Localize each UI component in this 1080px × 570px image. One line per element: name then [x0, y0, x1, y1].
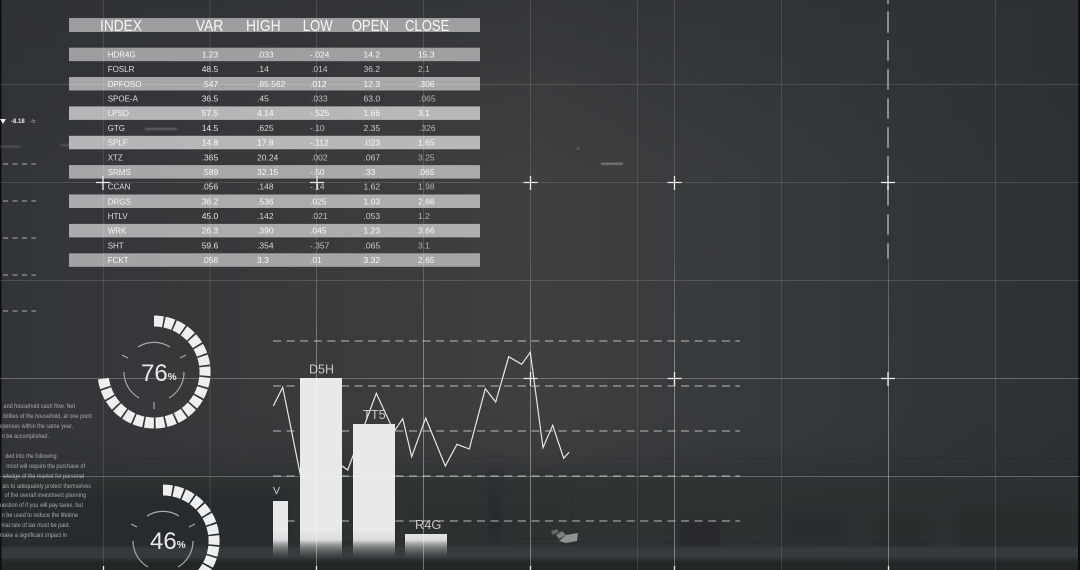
table HIGH column: .142 — [257, 211, 274, 221]
table LOW column: .025 — [310, 196, 327, 206]
left body paragraph, cropped by the edge: n be accomplished. — [2, 434, 49, 440]
bar: N — [273, 485, 288, 558]
table VAR column: 59.6 — [202, 240, 219, 250]
table ticker names: WRK — [108, 227, 127, 236]
table row stripes — [69, 48, 480, 267]
table LOW column: -.10 — [310, 123, 325, 133]
left body paragraph, cropped by the edge: uestion of if you will pay taxes, but — [0, 503, 83, 509]
table OPEN column: 12.3 — [364, 79, 380, 89]
table CLOSE column: 3.25 — [418, 152, 435, 162]
table HIGH column: 4.14 — [257, 108, 274, 118]
crosshair markers — [96, 176, 895, 570]
table header row: OPEN — [352, 18, 389, 35]
table ticker names: FOSLR — [108, 65, 135, 74]
segmented ring 76% — [103, 321, 205, 423]
left ticker marks: -5 — [30, 119, 36, 125]
table OPEN column — [364, 50, 380, 265]
bar chart — [273, 362, 447, 558]
table HIGH column: .85.562 — [257, 79, 286, 89]
table CLOSE column: 1.65 — [418, 138, 435, 148]
table HIGH column: .625 — [257, 123, 274, 133]
table header row — [69, 18, 480, 35]
table VAR column: .056 — [202, 255, 219, 265]
table CLOSE column — [418, 50, 436, 265]
table LOW column: -.024 — [310, 50, 330, 60]
table HIGH column: 17.8 — [257, 138, 274, 148]
table HIGH column: .45 — [257, 94, 269, 104]
segmented ring 46% — [163, 490, 214, 570]
left body paragraph, cropped by the edge — [0, 404, 92, 539]
table VAR column: .547 — [202, 79, 219, 89]
table CLOSE column: 1.2 — [418, 211, 430, 221]
table OPEN column: .067 — [364, 152, 380, 162]
left ticker marks — [0, 119, 36, 125]
table LOW column: -.14 — [310, 182, 325, 192]
inner dial 76% — [122, 342, 186, 409]
left body paragraph, cropped by the edge: ded into the following: — [5, 454, 58, 460]
table VAR column: 26.3 — [202, 226, 219, 236]
table CLOSE column: 1.98 — [418, 182, 435, 192]
table ticker names: DPFOSO — [108, 80, 141, 89]
table CLOSE column: .306 — [418, 79, 435, 89]
left body paragraph, cropped by the edge: n be used to reduce the lifetime — [2, 513, 79, 519]
table HIGH column: .14 — [257, 64, 269, 74]
table OPEN column: 1.03 — [364, 196, 380, 206]
table ticker names: SRMS — [108, 168, 131, 177]
table CLOSE column: 15.3 — [418, 50, 435, 60]
table LOW column: -.112 — [310, 138, 329, 148]
table CLOSE column: 2.66 — [418, 196, 435, 206]
table OPEN column: 63.0 — [364, 94, 380, 104]
table ticker names: HTLV — [108, 212, 128, 221]
table ticker names: SHT — [108, 241, 124, 250]
chart horizontal dashed lines — [273, 341, 740, 521]
table header row: CLOSE — [405, 18, 449, 35]
table CLOSE column: .065 — [419, 94, 436, 104]
motion streak artifacts — [0, 128, 623, 164]
table HIGH column: 32.15 — [257, 167, 279, 177]
data table — [69, 18, 480, 267]
table header row: LOW — [303, 18, 333, 35]
table VAR column: 48.5 — [202, 64, 219, 74]
inner dial 46% — [131, 511, 195, 567]
bar: R4G: R4G — [415, 517, 441, 532]
table VAR column: 45.0 — [202, 211, 219, 221]
table LOW column: -.50 — [310, 167, 325, 177]
table HIGH column: .354 — [257, 240, 274, 250]
table LOW column: .045 — [310, 226, 327, 236]
left body paragraph, cropped by the edge: inal rate of tax must be paid. — [1, 523, 70, 529]
table HIGH column: 20.24 — [257, 152, 279, 162]
line chart — [273, 352, 569, 519]
table CLOSE column: 2.1 — [418, 64, 430, 74]
table OPEN column: .33 — [364, 167, 376, 177]
donut gauge: 46% — [131, 490, 214, 570]
table OPEN column: 3.32 — [364, 255, 380, 265]
table LOW column: -.357 — [310, 240, 330, 250]
table CLOSE column: 3.1 — [418, 108, 430, 118]
left body paragraph, cropped by the edge: of the overall investment planning — [5, 493, 86, 499]
value 76%: 76 — [141, 360, 168, 387]
table HIGH column: .033 — [257, 50, 274, 60]
table header row: HIGH — [246, 18, 281, 35]
donut gauge: 76% — [103, 321, 205, 423]
table OPEN column: .023 — [364, 138, 380, 148]
left body paragraph, cropped by the edge: and household cash flow. Net — [4, 404, 75, 410]
table VAR column: 36.2 — [202, 196, 219, 206]
table ticker names: HDR4G — [108, 50, 136, 60]
table VAR column: 14.8 — [202, 138, 219, 148]
left body paragraph, cropped by the edge: wledge of the market for personal — [2, 474, 84, 480]
left dashed tick lines — [3, 164, 36, 311]
table OPEN column: 2.35 — [364, 123, 380, 133]
table LOW column: .012 — [310, 79, 327, 89]
table ticker names: SPLF — [108, 139, 128, 148]
table HIGH column: .148 — [257, 182, 274, 192]
table CLOSE column: .065 — [418, 167, 435, 177]
table header row: INDEX — [100, 18, 142, 35]
table CLOSE column: 3.66 — [418, 226, 435, 236]
value 76%: % — [168, 372, 177, 383]
table OPEN column: .065 — [364, 240, 380, 250]
table ticker names: DRGS — [108, 197, 131, 206]
table VAR column: 1.23 — [202, 50, 219, 60]
table OPEN column: 14.2 — [364, 50, 380, 60]
table ticker names: GTG — [108, 124, 125, 133]
table OPEN column: .053 — [364, 211, 380, 221]
table VAR column: .056 — [202, 182, 219, 192]
table OPEN column: 1.23 — [364, 226, 380, 236]
left body paragraph, cropped by the edge: bilities of the household, at one point — [3, 414, 92, 420]
bar: N: V — [273, 485, 280, 497]
table LOW column: .01 — [310, 255, 322, 265]
table VAR column: .365 — [202, 152, 219, 162]
bar: R4G — [405, 517, 447, 558]
bar: TT5: TT5 — [363, 407, 386, 422]
table HIGH column: .390 — [257, 226, 274, 236]
table VAR column — [202, 50, 219, 265]
bar: D5H: D5H — [309, 362, 334, 376]
left body paragraph, cropped by the edge: most will require the purchase of — [6, 464, 85, 470]
dashed vertical marker — [887, 0, 889, 258]
table HIGH column — [257, 50, 286, 265]
table VAR column: .589 — [202, 167, 219, 177]
table OPEN column: 1.66 — [364, 108, 380, 118]
table CLOSE column: 3.1 — [418, 240, 430, 250]
bar: TT5 — [353, 407, 395, 558]
table OPEN column: 36.2 — [364, 64, 380, 74]
table LOW column: .021 — [311, 211, 328, 221]
background photo: blurred skyline — [0, 462, 1080, 552]
bar: D5H — [300, 362, 342, 558]
foreground bands — [0, 547, 1080, 570]
left ticker marks: -8.18 — [11, 119, 25, 125]
table ticker names: CCAN — [108, 183, 131, 192]
left body paragraph, cropped by the edge: als to adequately protect themselves — [2, 484, 91, 490]
table CLOSE column: 2.65 — [418, 255, 435, 265]
bright blob artifact — [551, 529, 578, 543]
table VAR column: 14.5 — [202, 123, 219, 133]
left body paragraph, cropped by the edge: xpenses within the same year. — [0, 424, 73, 430]
table ticker names: FCKT — [108, 256, 129, 265]
table ticker names — [108, 50, 141, 265]
table LOW column — [310, 50, 330, 265]
table VAR column: 57.5 — [202, 108, 219, 118]
table LOW column: .033 — [311, 94, 328, 104]
table HIGH column: 3.3 — [257, 255, 269, 265]
value 46%: % — [177, 540, 186, 551]
table ticker names: SPOE-A — [108, 94, 139, 104]
table CLOSE column: .326 — [419, 123, 436, 133]
table LOW column: .002 — [311, 152, 328, 162]
value 46%: 46 — [150, 528, 177, 555]
table ticker names: XTZ — [108, 153, 123, 162]
table OPEN column: 1.62 — [364, 182, 380, 192]
table VAR column: 36.5 — [202, 94, 219, 104]
left body paragraph, cropped by the edge: make a significant impact in — [0, 533, 67, 539]
table header row: VAR — [196, 18, 223, 35]
table HIGH column: .536 — [257, 196, 274, 206]
table LOW column: -.525 — [310, 108, 330, 118]
table LOW column: .014 — [311, 64, 328, 74]
table ticker names: LPSO — [108, 109, 129, 118]
